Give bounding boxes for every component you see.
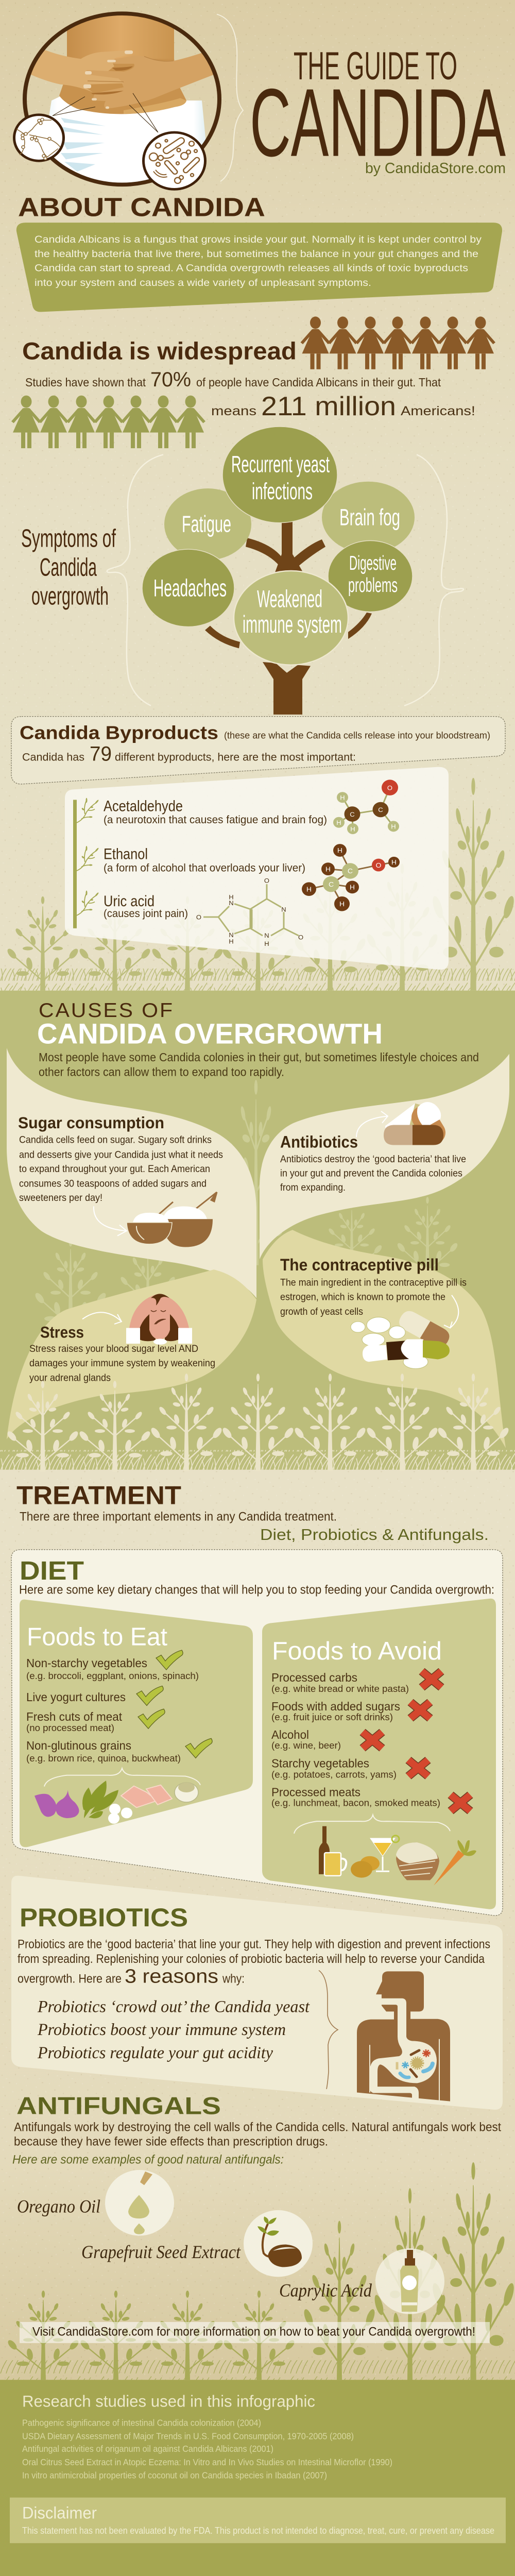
symptom: digestive problems: problems — [348, 574, 398, 597]
disclaimer: Disclaimer — [22, 2504, 97, 2522]
title: by CandidaStore.com — [365, 160, 506, 177]
callout: visit candidastore — [20, 2322, 490, 2343]
text: stress — [29, 1323, 215, 1383]
panel: candida byproducts header: different byproducts, here are the most important: — [115, 751, 356, 763]
research studies: Pathogenic significance of intestinal Candida colonization (2004) — [22, 2418, 261, 2428]
panel: byproducts list — [65, 767, 449, 970]
icon: beer mug — [324, 1853, 346, 1876]
research studies — [22, 2392, 392, 2480]
text: contraceptive pill: estrogen, which is known to promote the — [280, 1292, 445, 1302]
byproduct: uric acid: Uric acid — [104, 893, 154, 910]
panel: about candida: the healthy bacteria that live there, but sometimes the balance in your gut changes and the — [35, 248, 478, 260]
byproduct: ethanol — [104, 846, 305, 874]
molecule: uric acid: N — [229, 931, 234, 939]
leaf: stress — [7, 1269, 256, 1439]
icon: meat — [121, 1785, 172, 1807]
heading: antifungals: ANTIFUNGALS — [16, 2092, 221, 2120]
text: sugar consumption: sweeteners per day! — [19, 1192, 102, 1204]
panel: probiotics — [11, 1876, 503, 2110]
molecule: acetaldehyde: O — [387, 785, 392, 791]
decorative symptoms braces — [107, 454, 464, 706]
text: three reasons: Probiotics boost your immune system — [37, 2021, 286, 2039]
decorative finger details — [83, 50, 174, 109]
antifungal: caprylic acid: Caprylic Acid — [279, 2280, 372, 2301]
symptom: fatigue: Fatigue — [182, 511, 231, 537]
decorative brace: reasons — [319, 1970, 338, 2089]
text: stress: your adrenal glands — [29, 1372, 111, 1383]
molecule: uric acid: N — [281, 906, 286, 913]
text: contraceptive pill: growth of yeast cells — [280, 1306, 363, 1317]
text: probiotics intro — [18, 1938, 490, 1987]
list rail with twigs — [73, 798, 99, 928]
icon: spinach leaves — [82, 1781, 118, 1818]
heading: treatment: TREATMENT — [16, 1480, 181, 1510]
heading: about candida: ABOUT CANDIDA — [18, 193, 265, 222]
panel: foods to avoid: (e.g. potatoes, carrots, yams) — [271, 1769, 397, 1780]
antifungal: oregano oil: Oregano Oil — [17, 2196, 100, 2217]
stat: 211 million: 211 million — [261, 391, 396, 421]
heading: symptoms: Symptoms of — [21, 523, 116, 552]
heading: symptoms: overgrowth — [31, 582, 109, 610]
heading: probiotics: PROBIOTICS — [20, 1903, 188, 1932]
antifungal: oregano oil — [17, 2170, 174, 2235]
panel: about candida — [16, 223, 502, 312]
symptom: digestive problems: Digestive — [349, 552, 397, 574]
panel: foods to eat: (e.g. broccoli, eggplant, onions, spinach) — [26, 1671, 199, 1681]
molecule: ethanol: C — [329, 880, 334, 888]
molecule: uric acid: N — [229, 900, 234, 907]
panel: foods to avoid: Alcohol — [271, 1728, 309, 1741]
stat: 70 percent: Studies have shown that — [25, 376, 146, 389]
research studies: Oral Citrus Seed Extract in Atopic Eczema: In Vitro and In Vivo Studies on Intestinal Microflor (1990) — [22, 2457, 392, 2467]
panel: foods to eat: Live yogurt cultures — [26, 1690, 126, 1704]
stat: 211 million — [211, 391, 475, 421]
text: causes intro — [39, 1050, 479, 1079]
text: three elements: Diet, Probiotics & Antifungals. — [260, 1526, 489, 1544]
stat: 70 percent: 70% — [150, 368, 191, 391]
icon: martini — [370, 1836, 399, 1871]
research studies: Research studies used in this infographic — [22, 2392, 315, 2410]
molecule: uric acid: H — [264, 940, 269, 947]
icon: white eggs — [108, 1804, 132, 1824]
molecule: uric acid — [196, 877, 303, 947]
molecule: acetaldehyde: C — [378, 807, 383, 814]
text: antifungals examples lead: Here are some examples of good natural antifungals: — [12, 2153, 284, 2166]
byproduct: ethanol: (a form of alcohol that overloads your liver) — [104, 862, 305, 874]
molecule: acetaldehyde — [333, 779, 399, 834]
panel: foods to avoid: Processed meats — [271, 1786, 360, 1799]
text: sugar consumption — [18, 1114, 223, 1204]
symptom: headaches — [142, 549, 234, 626]
molecule: uric acid: H — [229, 938, 234, 945]
heading: causes of candida overgrowth: CAUSES OF — [39, 999, 173, 1022]
byproduct: ethanol: Ethanol — [104, 846, 148, 862]
panel: candida byproducts header: (these are what the Candida cells release into your bloodstream) — [224, 730, 490, 740]
icon: contraceptive pills — [351, 1295, 458, 1369]
text: antibiotics: Antibiotics — [280, 1133, 358, 1151]
leaf: sugar consumption — [7, 1048, 256, 1298]
symptom: brain fog — [322, 482, 415, 553]
panel: about candida: Candida can start to spread. A Candida overgrowth releases all kinds of toxic byproducts — [35, 263, 468, 274]
panel: foods to eat — [20, 1600, 253, 1847]
panel: foods to avoid: Foods to Avoid — [272, 1636, 442, 1665]
panel: about candida: into your system and causes a wide variety of unpleasant symptoms. — [35, 277, 371, 289]
section band: causes of candida overgrowth — [0, 991, 515, 1470]
symptom: weakened immune system — [234, 571, 348, 665]
panel: candida byproducts header: 79 — [90, 742, 112, 765]
symptom: headaches: Headaches — [153, 575, 227, 602]
byproduct: uric acid — [104, 893, 188, 920]
molecule: ethanol: H — [337, 847, 342, 854]
symptom: weakened immune system: immune system — [243, 611, 342, 638]
text: antibiotics — [280, 1133, 466, 1193]
heading: causes of candida overgrowth: CANDIDA OVERGROWTH — [37, 1018, 383, 1049]
symptom: fatigue — [164, 488, 251, 560]
molecule: ethanol: H — [325, 866, 331, 873]
symptom: brain fog: Brain fog — [339, 504, 400, 530]
text: contraceptive pill — [280, 1256, 467, 1317]
text: stress: damages your immune system by weakening — [29, 1358, 215, 1369]
text: probiotics intro: 3 reasons — [125, 1965, 218, 1987]
symptom: digestive problems — [328, 540, 413, 612]
icon: green people chain — [12, 396, 204, 448]
molecule: ethanol: O — [376, 861, 381, 869]
heading: diet: DIET — [20, 1556, 84, 1586]
icon: carrot — [434, 1840, 476, 1886]
text: antibiotics: Antibiotics destroy the ‘good bacteria’ that live — [280, 1154, 466, 1165]
molecule: ethanol: H — [350, 884, 355, 891]
icon: check marks — [136, 1650, 212, 1758]
research studies: In vitro antimicrobial properties of coconut oil on Candida species in Ibadan (2007) — [22, 2470, 327, 2480]
symptom: recurrent yeast infections: infections — [252, 478, 313, 504]
research studies: Antifungal activities of origanum oil against Candida Albicans (2001) — [22, 2444, 273, 2454]
text: sugar consumption: to expand throughout your gut. Each American — [19, 1163, 210, 1175]
icon: sugar bowls — [94, 1192, 217, 1247]
text: contraceptive pill: The main ingredient in the contraceptive pill is — [280, 1277, 467, 1289]
molecule: acetaldehyde: H — [350, 826, 355, 833]
antifungal: grapefruit seed extract — [81, 2210, 313, 2277]
background trees: causes — [33, 1080, 459, 1341]
decorative brace: foods to eat — [44, 1768, 200, 1787]
byproduct: acetaldehyde — [104, 798, 327, 826]
molecule: uric acid: N — [264, 932, 269, 939]
tree trunk and branches — [205, 520, 372, 715]
symptom: recurrent yeast infections: Recurrent yeast — [231, 451, 330, 477]
panel: foods to avoid: Foods with added sugars — [271, 1700, 400, 1713]
leaf: antibiotics — [260, 1054, 509, 1259]
stat: 211 million: means — [211, 404, 256, 418]
molecule: ethanol: C — [348, 868, 353, 875]
molecule: uric acid: O — [298, 934, 303, 941]
panel: foods to avoid — [262, 1599, 496, 1909]
panel: foods to eat: Non-glutinous grains — [26, 1739, 131, 1752]
callout: visit candidastore: Visit CandidaStore.com for more information on how to beat your Candida overgrowth! — [32, 2325, 475, 2338]
text: sugar consumption: and desserts give your Candida just what it needs — [19, 1149, 223, 1160]
text: antibiotics: in your gut and prevent the Candida colonies — [280, 1168, 462, 1179]
icon: gut bacteria magnifier — [143, 132, 205, 189]
text: three reasons: Probiotics ‘crowd out’ the Candida yeast — [37, 1997, 310, 2016]
stat: 211 million: Americans! — [401, 404, 475, 418]
byproduct: uric acid: (causes joint pain) — [104, 907, 188, 920]
symptom: weakened immune system: Weakened — [257, 585, 322, 613]
panel: candida byproducts header: Candida has — [22, 751, 84, 763]
text: three reasons: Probiotics regulate your gut acidity — [37, 2044, 273, 2062]
panel: foods to eat: (e.g. brown rice, quinoa, buckwheat) — [26, 1753, 181, 1764]
panel: foods to avoid: (e.g. lunchmeat, bacon, smoked meats) — [271, 1798, 440, 1808]
research studies: USDA Dietary Assessment of Major Trends in U.S. Food Consumption, 1970-2005 (2008) — [22, 2431, 354, 2441]
icon: cross marks — [363, 1671, 470, 1811]
molecule: ethanol: H — [339, 900, 345, 908]
icon: candida network magnifier — [14, 115, 64, 161]
text: stress: Stress raises your blood sugar level AND — [29, 1344, 198, 1354]
byproduct: acetaldehyde: Acetaldehyde — [104, 798, 183, 815]
icon: antibiotic capsules — [356, 1101, 450, 1149]
footer band — [0, 2380, 515, 2576]
heading: symptoms — [21, 523, 116, 610]
text: treatment intro: There are three important elements in any Candida treatment. — [20, 1510, 337, 1523]
panel: about candida: Candida Albicans is a fungus that grows inside your gut. Normally it is kept under control by — [35, 234, 482, 245]
molecule: uric acid: O — [264, 877, 269, 884]
text: antifungals intro — [14, 2121, 501, 2148]
gut illustration — [23, 7, 221, 196]
decorative header brace — [217, 14, 243, 181]
text: antibiotics: from expanding. — [280, 1182, 346, 1193]
heading: symptoms: Candida — [40, 553, 97, 581]
molecule: uric acid: O — [196, 914, 201, 921]
disclaimer — [10, 2498, 506, 2543]
panel: foods to avoid: (e.g. wine, beer) — [271, 1740, 341, 1751]
panel: candida byproducts header: Candida Byproducts — [20, 722, 218, 743]
text: antifungals intro: because they have fewer side effects than prescription drugs. — [14, 2135, 328, 2148]
stat: 70 percent: of people have Candida Albicans in their gut. That — [196, 376, 441, 389]
molecule: uric acid: H — [229, 894, 234, 901]
icon: potatoes — [351, 1856, 380, 1878]
text: sugar consumption: Candida cells feed on sugar. Sugary soft drinks — [19, 1134, 212, 1146]
heading: causes of candida overgrowth — [37, 999, 383, 1049]
byproduct: acetaldehyde: (a neurotoxin that causes fatigue and brain fog) — [104, 814, 327, 826]
leaf: contraceptive pill — [263, 1230, 506, 1448]
symptom: recurrent yeast infections — [222, 427, 337, 523]
text: probiotics intro: why: — [222, 1972, 245, 1986]
panel: foods to avoid: Starchy vegetables — [271, 1757, 369, 1770]
trees and grass: end of causes — [0, 1374, 515, 1471]
panel: foods to eat: Foods to Eat — [27, 1622, 167, 1651]
molecule: acetaldehyde: C — [350, 811, 355, 818]
text: sugar consumption: Sugar consumption — [18, 1114, 164, 1132]
icon: digestive system figure — [357, 1971, 450, 2102]
molecule: ethanol — [302, 844, 400, 911]
text: stress: Stress — [40, 1323, 84, 1341]
molecule: ethanol: H — [306, 886, 312, 893]
panel: foods to avoid: (e.g. fruit juice or soft drinks) — [271, 1711, 393, 1722]
icon: stressed person — [82, 1294, 192, 1345]
antifungal: grapefruit seed extract: Grapefruit Seed Extract — [81, 2242, 241, 2263]
molecule: acetaldehyde: H — [340, 794, 345, 801]
molecule: acetaldehyde: H — [391, 823, 396, 831]
stat: 70 percent — [25, 368, 441, 391]
molecule: acetaldehyde: H — [336, 819, 341, 826]
background trees: antifungals — [0, 2162, 515, 2380]
background trees: byproducts — [0, 778, 515, 991]
decorative brace: foods to avoid — [294, 1815, 450, 1834]
molecule: ethanol: H — [391, 858, 397, 866]
icon: onions — [35, 1790, 79, 1818]
panel: foods to eat: (no processed meat) — [26, 1722, 114, 1733]
panel: diet — [0, 1550, 515, 2576]
symptoms tree — [142, 427, 415, 715]
panel: candida byproducts header — [11, 717, 505, 784]
text: three reasons — [37, 1997, 310, 2062]
icon: wine bottle — [319, 1826, 330, 1874]
text: causes intro: other factors can allow them to expand too rapidly. — [39, 1065, 284, 1079]
antifungal: caprylic acid — [279, 2248, 444, 2314]
icon: grain bowl — [175, 1783, 198, 1802]
panel: foods to eat: Fresh cuts of meat — [26, 1710, 122, 1723]
panel: foods to eat: Non-starchy vegetables — [26, 1657, 147, 1670]
icon: brown people chain — [302, 316, 494, 369]
text: sugar consumption: consumes 30 teaspoons of added sugars and — [19, 1178, 207, 1189]
text: contraceptive pill: The contraceptive pill — [280, 1256, 439, 1275]
panel: foods to avoid: Processed carbs — [271, 1671, 357, 1684]
icon: bread — [396, 1842, 439, 1880]
panel: foods to avoid: (e.g. white bread or white pasta) — [271, 1683, 409, 1694]
text: probiotics intro: overgrowth. Here are — [18, 1972, 122, 1986]
heading: candida is widespread: Candida is widespread — [22, 338, 297, 365]
